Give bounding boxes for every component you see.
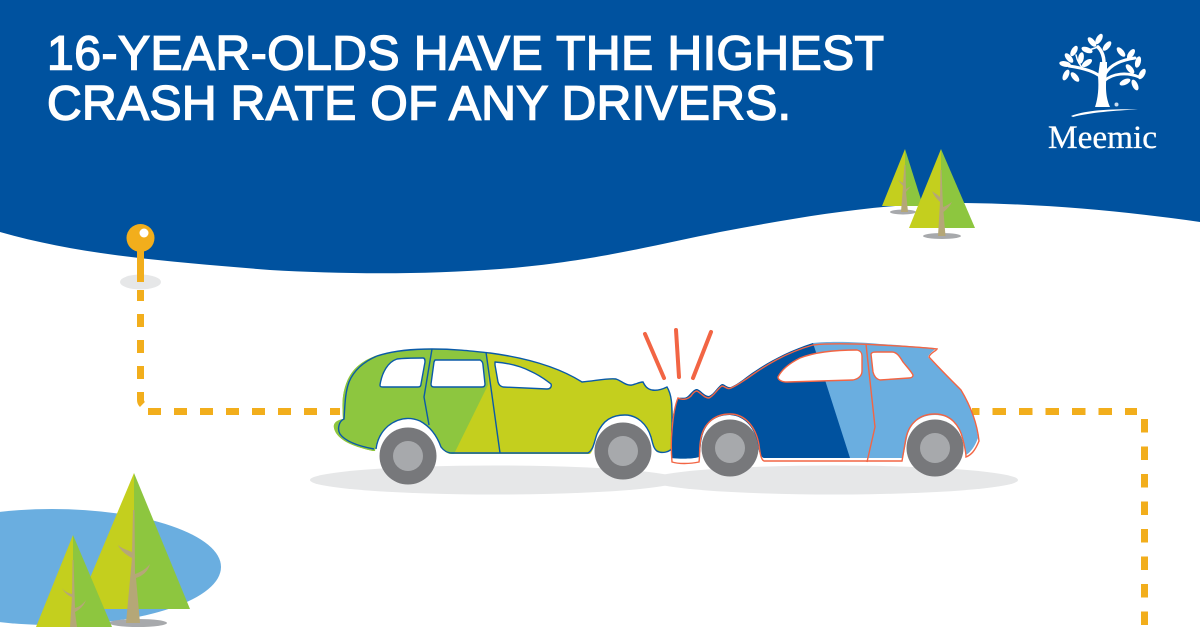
registered mark: [1114, 102, 1118, 106]
green car body: [334, 349, 673, 454]
green car door lines: [424, 349, 500, 453]
blue car outline: [671, 344, 979, 464]
map pin: [120, 224, 161, 290]
title: 16-YEAR-OLDS HAVE THE HIGHEST: [47, 28, 884, 80]
green car wheels: [380, 422, 652, 484]
blue car windows: [778, 350, 913, 382]
dashed road: right: [972, 412, 1144, 627]
green car windows: [380, 358, 551, 389]
pin highlight: [140, 228, 148, 238]
blue car body: [671, 342, 979, 464]
dashed road: left: [140, 290, 340, 412]
lake: [0, 509, 221, 625]
car: blue: [671, 342, 979, 476]
title: CRASH RATE OF ANY DRIVERS.: [47, 78, 791, 130]
big tree shadow: [109, 619, 167, 627]
logo swoosh: [1071, 109, 1138, 117]
green car outline: [339, 349, 672, 453]
logo wordmark: Meemic: [1048, 120, 1157, 156]
tree shadow front: [923, 233, 961, 239]
car: green: [334, 349, 673, 484]
trees: top right: [882, 149, 975, 239]
trees: bottom left: [36, 473, 190, 627]
background: blue sky wave: [0, 0, 1200, 273]
pin head: [126, 224, 154, 252]
tree shadow back: [890, 210, 916, 214]
logo: Meemic tree: [1048, 33, 1157, 156]
icon: tree trunk: [1095, 62, 1110, 107]
tree front: [909, 149, 975, 236]
impact spark lines: [645, 330, 711, 378]
pin stem: [137, 245, 144, 282]
icon: tree leaves: [1059, 33, 1147, 91]
pin shadow: [120, 274, 161, 290]
title: [47, 28, 884, 130]
blue car wheels: [702, 420, 964, 476]
small tree: [36, 535, 112, 627]
icon: tree branches: [1069, 47, 1139, 81]
tree back: [882, 149, 923, 212]
big tree: [77, 473, 190, 623]
car shadows: [310, 466, 1018, 494]
blue car door line: [866, 344, 875, 462]
